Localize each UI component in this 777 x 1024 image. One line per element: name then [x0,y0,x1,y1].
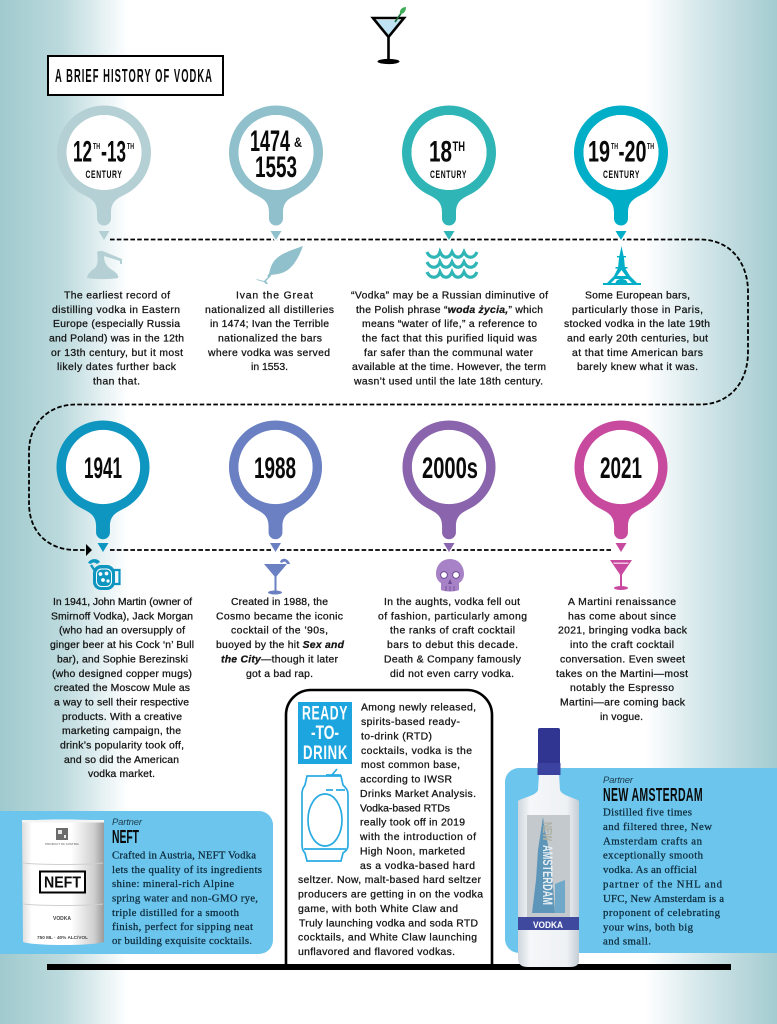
pin: 12th-13th century [57,105,151,240]
timeline dashed path [29,240,748,556]
text: 1941: and so did the American [64,755,179,766]
text: 12th-13th century: and Poland) was in the 12th [49,334,184,344]
pin: 19th-20th century [574,105,668,240]
text: 12th-13th century: distilling vodka in Eastern [52,305,180,316]
text: 18th century: the Polish phrase “woda życia,” which [356,305,543,316]
text: new amsterdam description: and small. [603,936,651,948]
pin: 12th-13th century: TH [127,142,134,151]
pin: 18th century: TH [452,138,465,154]
icon: feather quill [256,246,303,284]
text: 1988: Created in 1988, the [231,597,328,608]
text: 18th century: far safer than the communal water [364,348,534,359]
text: 2021: 2021, bringing vodka back [558,626,688,637]
label: partner: Partner [603,775,634,786]
text: 19th-20th century: at that time American bars [572,348,703,359]
text: new amsterdam description: your wins, both big [603,922,694,934]
text: 1941 [50,597,194,780]
pin: 1474 & 1553: & [294,134,302,150]
text: 1941: vodka market. [88,769,155,780]
text: neft description [112,850,262,947]
image: neft barrel: VODKA [53,916,71,922]
text: 2000s: the ranks of craft cocktail [390,626,515,637]
text: 2000s [378,597,527,680]
pin: 19th-20th century: CENTURY [603,169,640,181]
text: 2021: takes on the Martini—most [556,669,688,680]
text: 1988: buoyed by the hit Sex and [216,640,345,651]
text: 2021: conversation. Even sweet [560,654,685,665]
text: 1941: created the Moscow Mule as [54,683,190,694]
text: new amsterdam description: vodka. As an official [603,864,697,876]
image: new amsterdam bottle: NEW [540,822,555,841]
icon: cosmo glass [264,559,290,594]
text: 18th century [351,290,548,388]
pin: 18th century [402,105,496,240]
text: 2021: has come about since [568,611,676,622]
icon: moscow mule pitcher [88,559,120,590]
text: 1941: In 1941, John Martin (owner of [53,597,192,608]
text: 2000s: bars to debut this decade. [387,640,518,651]
text: 1941: ginger beer at his Cock ‘n’ Bull [50,640,194,651]
badge: ready-to-drink: DRINK [303,742,348,764]
text: 2021 [556,597,688,723]
text: 18th century: means “water of life,” a reference to [362,319,537,330]
text: 12th-13th century: Europe (especially Russia [53,319,180,330]
pin: 12th-13th century: - [101,136,107,168]
text: 1474 and 1553: Ivan the Great [236,290,313,302]
text: 18th century: available at the time. However, the term [352,362,546,373]
icon: eiffel tower [603,246,641,285]
text: ready-to-drink article: Drinks Market Analysis. [360,789,476,800]
text: 1474 and 1553: in 1553. [251,362,288,373]
text: new amsterdam description [603,806,724,948]
text: neft description: spring water and non-GMO rye, [112,892,258,904]
text: 2021: into the craft cocktail [570,640,674,651]
text: 1941: a way to sell their respective [54,698,189,708]
icon: skull [436,559,464,592]
text: ready-to-drink article: most common base, [361,760,460,771]
text: ready-to-drink article: cocktails, and White Claw launching [298,933,477,944]
icon: martini [610,560,632,590]
pin: 12th-13th century: TH [93,142,100,151]
image: neft barrel: PRODUCT OF AUSTRIA [45,842,79,846]
heading: a brief history of vodka [48,56,223,95]
text: neft description: shine: mineral-rich Alpine [112,878,234,890]
text: neft description: Crafted in Austria, NEFT Vodka [112,850,256,862]
image: neft barrel: NEFT [44,874,81,892]
icon: can [302,769,348,861]
text: 1941: products. With a creative [62,712,182,723]
text: 19th-20th century: particularly those in Paris, [572,305,703,316]
brand name: neft: NEFT [112,827,139,847]
icon: martini glass [373,7,406,64]
badge: ready-to-drink: -TO- [311,722,339,744]
text: 1941: drink’s popularity took off, [60,740,184,752]
icon: alembic still [87,251,122,279]
text: 2021: in vogue. [600,712,643,723]
text: 19th-20th century: and early 20th centuries, but [567,334,708,344]
text: 1941: (who had an oversupply of [59,626,185,637]
text: 12th-13th century: The earliest record of [64,290,170,302]
text: 1988 [216,597,345,680]
text: 1474 and 1553: in 1474; Ivan the Terrible [210,319,329,330]
pin: 19th-20th century: TH [611,142,618,151]
pin: 2000s [402,420,496,552]
pin: 1988 [229,420,322,552]
text: new amsterdam description: UFC, New Amsterdam is a [603,893,724,905]
text: ready-to-drink article [298,702,483,958]
text: ready-to-drink article: really took off in 2019 [360,818,465,829]
pin: 1474 & 1553 [229,105,323,240]
text: 2000s: Death & Company famously [384,654,522,665]
text: 2000s: In the aughts, vodka fell out [384,597,520,608]
text: ready-to-drink article: High Noon, marketed [360,846,465,858]
pin: 1941 [56,420,150,552]
text: ready-to-drink article: cocktails, vodka is the [361,746,472,757]
text: 1988: cocktail of the ’90s, [231,626,328,637]
pin: 12th-13th century: 13 [107,136,126,168]
pin: 18th century: 18 [429,136,452,168]
image: new amsterdam bottle: AMSTERDAM [540,845,556,905]
text: 1941: (who designed copper mugs) [52,669,192,680]
text: ready-to-drink article: game, with both White Claw and [298,904,458,915]
text: neft description: triple distilled for a smooth [112,907,240,919]
text: 12th-13th century: likely dates further back [57,362,177,373]
image: neft barrel: 750 ML · 40% ALC/VOL [37,935,88,940]
text: ready-to-drink article: producers are getting in on the vodka [298,890,483,900]
text: ready-to-drink article: with the introduction of [359,832,476,843]
text: 18th century: the fact that this purified liquid was [362,334,537,344]
text: 1941: bar), and Sophie Berezinski [57,654,188,665]
text: 1988: the City—though it later [221,654,339,665]
pin: 18th century: CENTURY [430,169,467,181]
text: new amsterdam description: Amsterdam crafts an [603,835,703,847]
text: 19th-20th century: barely knew what it was. [577,362,698,373]
badge: ready-to-drink: READY [302,702,348,724]
text: new amsterdam description: exceptionally smooth [603,850,704,862]
pin: 1941: 1941 [84,452,122,485]
text: 1941: Smirnoff Vodka), Jack Morgan [51,611,193,622]
text: 1988: Cosmo became the iconic [216,611,343,622]
pin: 2021: 2021 [600,452,642,485]
pin: 1988: 1988 [254,452,296,485]
text: neft description: lets the quality of its ingredients [112,864,262,876]
text: 2000s: did not even carry vodka. [390,669,514,680]
text: neft description: or building exquisite cocktails. [112,935,252,947]
text: 2021: A Martini renaissance [568,597,676,608]
text: ready-to-drink article: seltzer. Now, malt-based hard seltzer [298,875,482,886]
text: new amsterdam description: and filtered three, New [603,821,712,833]
pin: 12th-13th century: CENTURY [86,169,122,181]
pin: 1474 & 1553: 1474 [250,125,290,158]
text: new amsterdam description: proponent of celebrating [603,907,721,919]
pin: 1474 & 1553: 1553 [255,151,297,184]
text: new amsterdam description: partner of the NHL and [603,878,723,890]
text: 12th-13th century: or 13th century, but it most [51,348,183,359]
brand name: new amsterdam: NEW AMSTERDAM [603,784,703,805]
pin: 19th-20th century: - [618,136,624,168]
image: new amsterdam bottle: VODKA [533,920,563,930]
text: 1474 and 1553: where vodka was served [207,348,330,359]
pin: 12th-13th century: 12 [73,136,92,168]
text: new amsterdam description: Distilled five times [603,806,692,818]
text: 18th century: “Vodka” may be a Russian diminutive of [351,290,548,302]
text: neft description: finish, perfect for sipping neat [112,921,253,933]
panel: neft partner [0,811,273,954]
text: 1474 and 1553: nationalized all distilleries [205,305,334,316]
text: ready-to-drink article: as a vodka-based hard [360,861,475,872]
text: 1474 and 1553 [205,290,334,373]
text: ready-to-drink article: Truly launching vodka and soda RTD [299,918,478,929]
text: ready-to-drink article: unflavored and flavored vodkas. [298,947,455,958]
pin: 19th-20th century: 20 [624,136,646,168]
text: 2021: notably the Espresso [570,683,674,694]
text: ready-to-drink article: Vodka-based RTDs [360,803,450,814]
text: ready-to-drink article: Among newly released, [361,702,476,714]
text: ready-to-drink article: according to IWSR [360,774,452,786]
text: 1941: marketing campaign, the [62,726,181,737]
label: partner: Partner [112,817,143,828]
text: 1988: got a bad rap. [246,669,313,680]
image: neft barrel [22,820,104,945]
pin: 19th-20th century: TH [647,142,654,151]
image: new amsterdam bottle [518,728,579,967]
text: 2000s: of fashion, particularly among [378,611,527,622]
rule: bottom line [47,964,731,970]
text: 12th-13th century [49,290,184,388]
text: 19th-20th century [564,290,710,373]
pin: 2021 [574,420,668,552]
pin: 2000s: 2000s [422,452,478,485]
text: 18th century: wasn’t used until the late 18th century. [353,376,543,388]
text: 1474 and 1553: nationalized the bars [218,334,322,344]
text: 19th-20th century: Some European bars, [585,290,690,302]
panel: ready-to-drink [286,690,492,967]
text: 2021: Martini—are coming back [560,698,686,708]
heading: a brief history of vodka: A BRIEF HISTORY OF VODKA [55,66,213,86]
text: ready-to-drink article: spirits-based ready- [361,717,460,728]
badge: ready-to-drink [298,702,352,764]
text: 12th-13th century: than that. [93,376,140,388]
text: 19th-20th century: stocked vodka in the late 19th [564,319,710,330]
panel: new amsterdam partner [505,768,777,953]
pin: 19th-20th century: 19 [588,136,610,168]
icon: water waves [427,252,477,277]
text: ready-to-drink article: to-drink (RTD) [361,732,432,742]
